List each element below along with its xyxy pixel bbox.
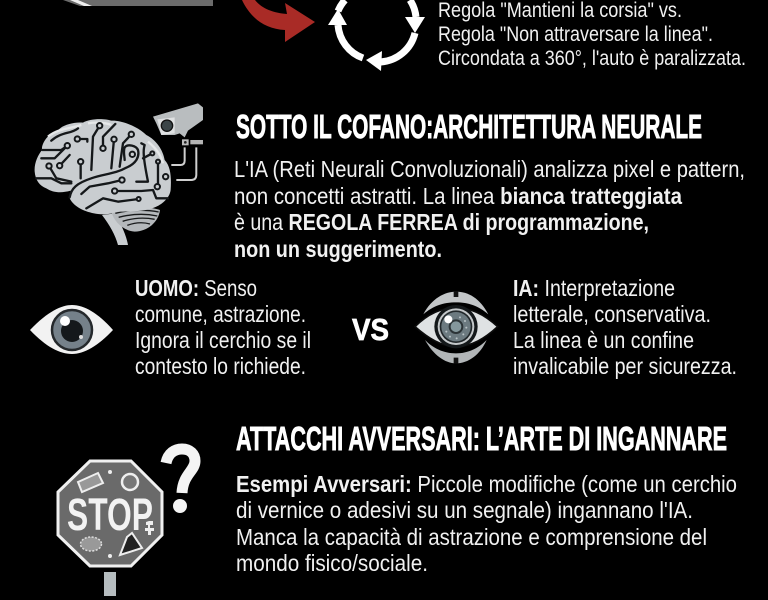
icon: red curved arrow bbox=[242, 0, 315, 42]
text block: adversarial examples: mondo fisico/sociale. bbox=[236, 550, 428, 576]
stickers bbox=[78, 470, 154, 558]
brain body bbox=[35, 119, 171, 214]
text block: IA: IA: Interpretazione bbox=[513, 275, 675, 301]
text block: rule conflict bbox=[438, 0, 746, 70]
text block: adversarial examples: Esempi Avversari: Piccole modifiche (come un cerchio bbox=[236, 471, 737, 497]
text block: adversarial examples: Manca la capacità di astrazione e comprensione del bbox=[236, 524, 707, 550]
text block: neural architecture: non un suggerimento. bbox=[234, 236, 442, 262]
text block: uomo: contesto lo richiede. bbox=[135, 353, 306, 379]
text block: rule conflict: Regola "Non attraversare la linea". bbox=[438, 23, 713, 46]
brain stem bbox=[102, 213, 128, 245]
icon: circular arrows bbox=[328, 0, 425, 71]
octagon bbox=[58, 461, 162, 566]
icon: human eye bbox=[30, 305, 113, 354]
circuit nodes bbox=[46, 123, 168, 201]
text block: uomo bbox=[135, 275, 311, 379]
icon: AI eye bbox=[415, 291, 498, 364]
road fragment illustration bbox=[63, 0, 213, 6]
icon: stop sign with stickers and question mark bbox=[58, 449, 195, 596]
icon: brain with circuits and camera bbox=[35, 103, 203, 245]
text block: IA bbox=[513, 275, 737, 379]
text block: uomo: comune, astrazione. bbox=[135, 301, 306, 327]
label: versus: VS bbox=[352, 312, 389, 347]
text block: neural architecture: non concetti astratti. La linea bianca tratteggiata bbox=[234, 183, 682, 209]
security camera bbox=[153, 103, 203, 137]
light highlights bbox=[48, 123, 163, 163]
text block: adversarial examples bbox=[236, 471, 737, 576]
cerebellum bbox=[111, 207, 160, 232]
circuit lines bbox=[36, 124, 168, 208]
text block: uomo: Ignora il cerchio se il bbox=[135, 327, 311, 353]
text block: IA: invalicabile per sicurezza. bbox=[513, 353, 737, 379]
text block: adversarial examples: di vernice o adesivi su un segnale) ingannano l'IA. bbox=[236, 497, 693, 523]
text block: IA: La linea è un confine bbox=[513, 327, 694, 353]
sign word: STOP bbox=[67, 489, 153, 540]
text block: neural architecture bbox=[234, 156, 745, 262]
text block: uomo: UOMO: Senso bbox=[135, 275, 257, 301]
text block: neural architecture: è una REGOLA FERREA di programmazione, bbox=[234, 209, 649, 235]
sign post bbox=[104, 572, 116, 596]
question mark bbox=[166, 449, 195, 513]
text block: IA: letterale, conservativa. bbox=[513, 301, 711, 327]
